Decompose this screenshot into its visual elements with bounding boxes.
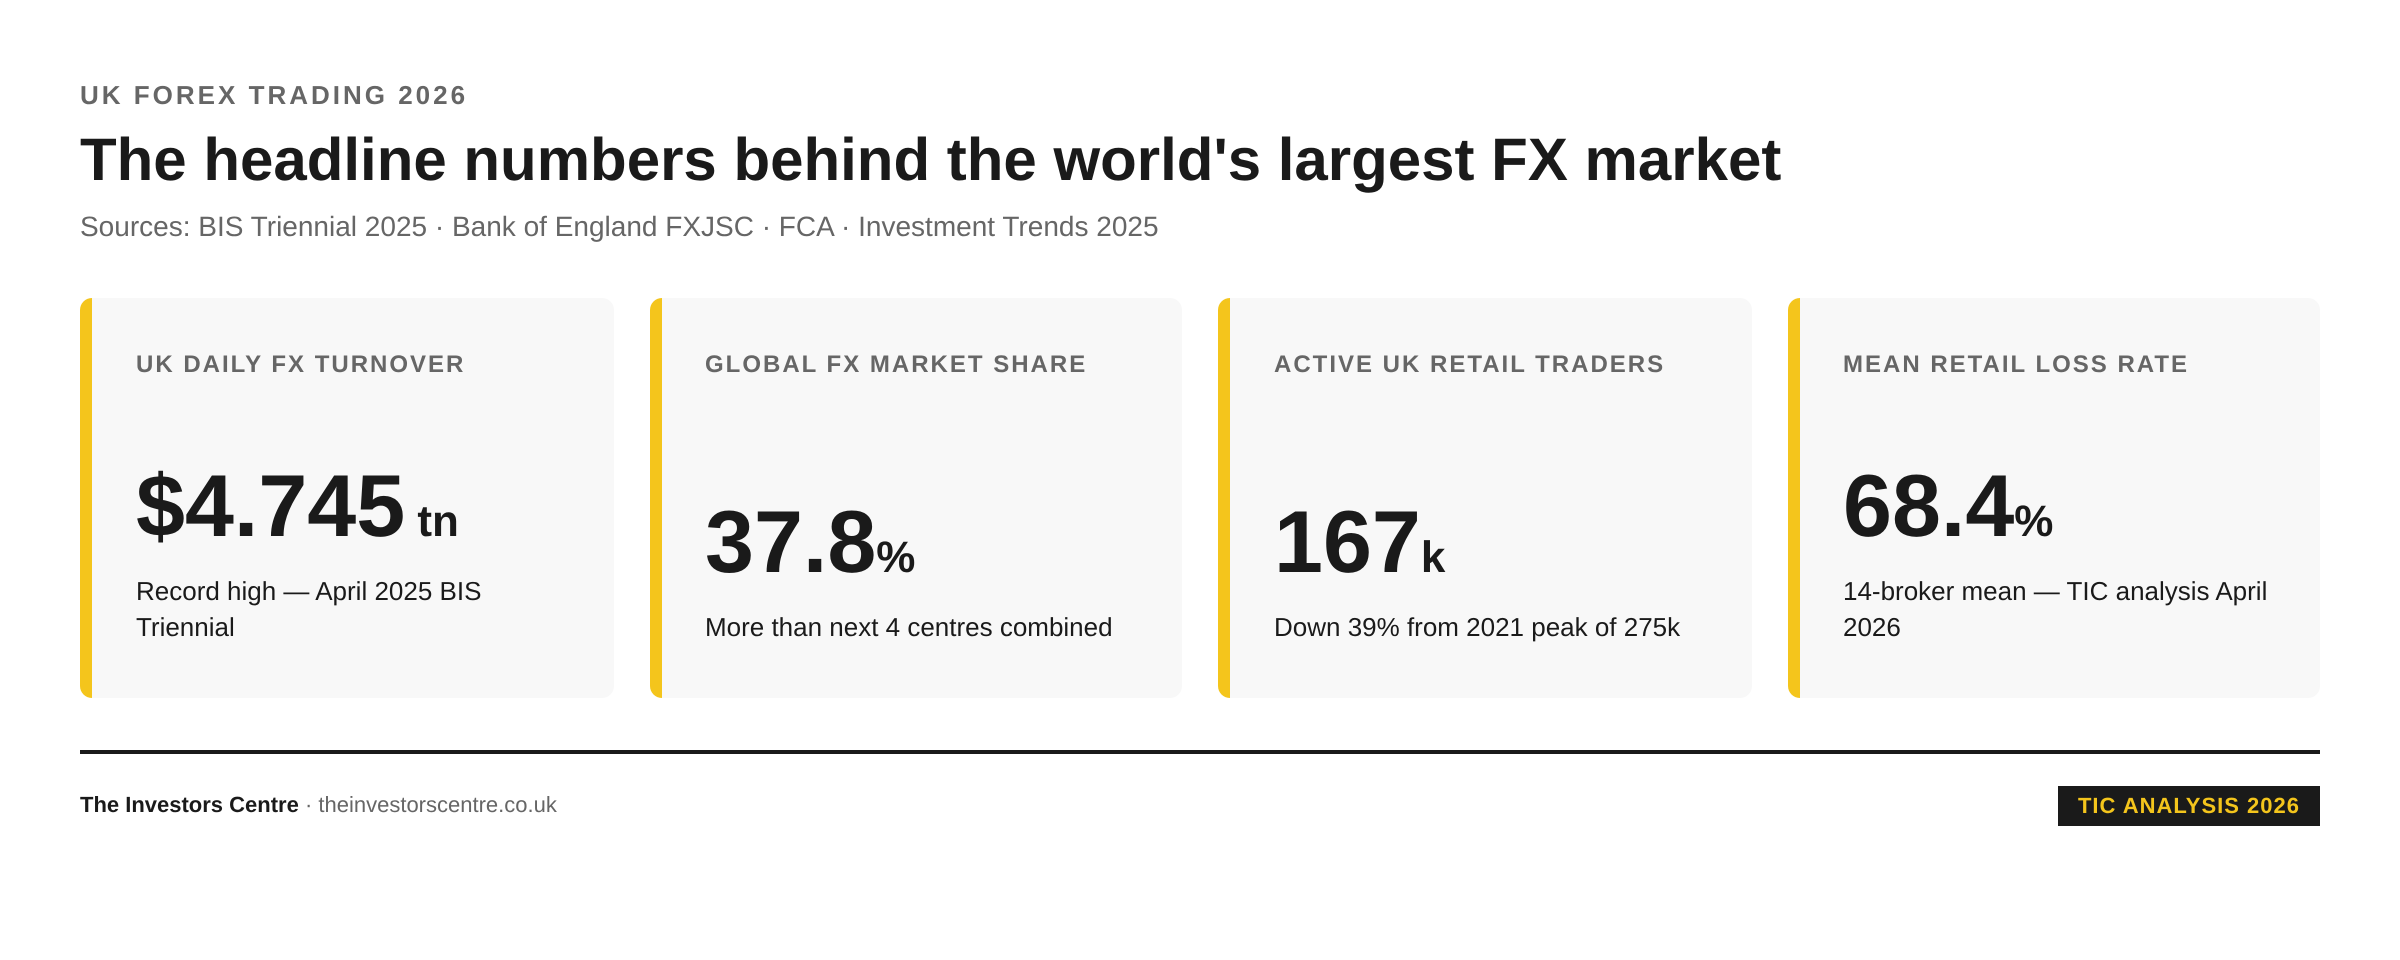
- card description: 14-broker mean — TIC analysis April 2026: [1843, 576, 2267, 642]
- card label: ACTIVE UK RETAIL TRADERS: [1274, 351, 1665, 378]
- badge: TIC analysis: [2058, 786, 2320, 826]
- panel: global FX market share: [650, 298, 1182, 698]
- eyebrow heading: UK FOREX TRADING 2026: [80, 80, 468, 110]
- card label: MEAN RETAIL LOSS RATE: [1843, 351, 2189, 378]
- card value: $4.745 tn: [136, 456, 459, 555]
- card description: More than next 4 centres combined: [705, 612, 1113, 642]
- card value: 68.4%: [1843, 456, 2053, 555]
- card description: Record high — April 2025 BIS Triennial: [136, 576, 481, 642]
- card label: UK DAILY FX TURNOVER: [136, 351, 465, 378]
- sources line: Sources: BIS Triennial 2025 · Bank of England FXJSC · FCA · Investment Trends 2025: [80, 211, 1159, 242]
- card value: 37.8%: [705, 492, 915, 591]
- title: The headline numbers behind the world's largest FX market: [80, 126, 1781, 193]
- panel: active UK retail traders: [1218, 298, 1752, 698]
- footer attribution: The Investors Centre · theinvestorscentre.co.uk: [80, 792, 557, 817]
- card value: 167k: [1274, 492, 1445, 591]
- panel: UK daily FX turnover: [80, 298, 614, 698]
- panel: mean retail loss rate: [1788, 298, 2320, 698]
- card label: GLOBAL FX MARKET SHARE: [705, 351, 1087, 378]
- card description: Down 39% from 2021 peak of 275k: [1274, 612, 1680, 642]
- badge: TIC analysis: TIC ANALYSIS 2026: [2078, 793, 2300, 818]
